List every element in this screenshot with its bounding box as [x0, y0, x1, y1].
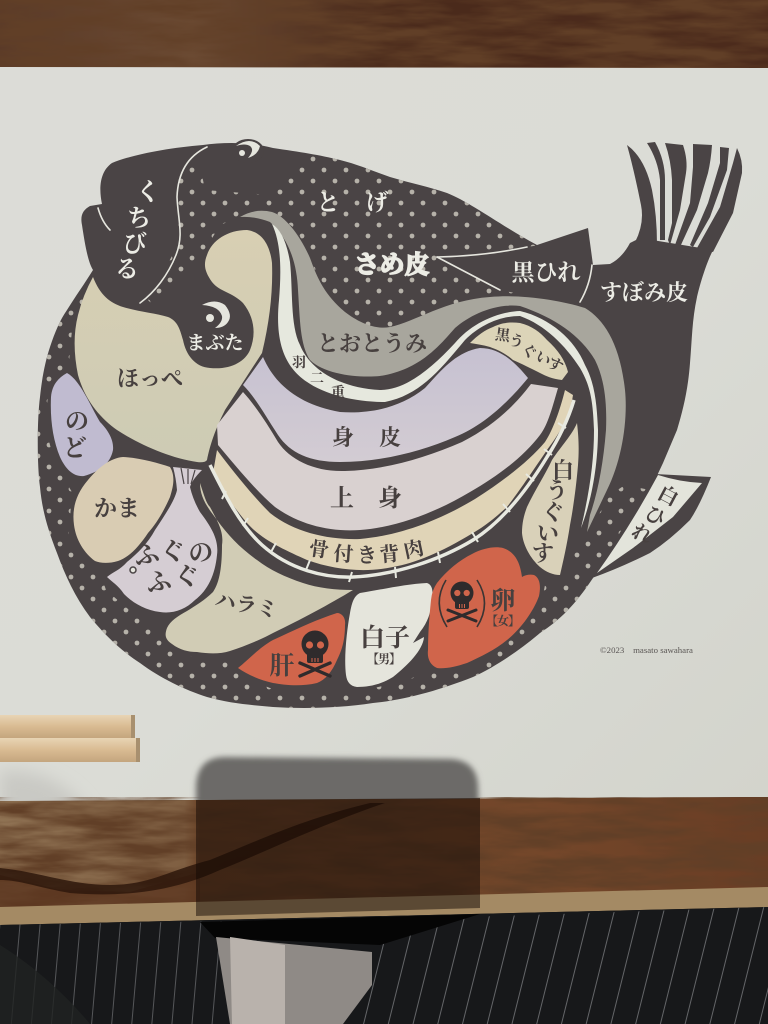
label 白ひれ: 白: [654, 481, 682, 511]
label 骨付き背肉: [307, 536, 426, 567]
label ハラミ: ハラミ: [213, 588, 279, 622]
eye on top of head: [232, 139, 264, 163]
black warbler muscle 黒うぐいす: [470, 322, 568, 380]
label 白子: 白子: [360, 624, 410, 652]
liver region 肝: [238, 613, 345, 685]
label ふぐのふぐ: ぐ: [159, 537, 187, 568]
paper placemat: [0, 67, 768, 801]
dark pinstripe clothing below table: [0, 907, 768, 1024]
small fugu shape ふぐのふぐ: [107, 467, 217, 612]
label ほっぺ: ほっぺ: [117, 366, 183, 391]
label 黒ひれ: 黒ひれ: [512, 260, 580, 285]
collar region かま: [73, 457, 173, 563]
label 女 bracket: 【女】: [486, 613, 520, 628]
label 黒うぐいす: [494, 326, 566, 376]
dotted skin zones: [30, 150, 650, 720]
label すぼみ皮: すぼみ皮: [600, 280, 688, 305]
tail fin rays: [627, 142, 742, 252]
label かま: かま: [94, 496, 140, 521]
とおとうみ grey band: [240, 211, 626, 532]
label 黒うぐいす: ぐ: [519, 341, 539, 363]
label ふぐのふぐ: ぐ: [173, 562, 201, 593]
phone shadow on paper and table: [196, 757, 480, 916]
faint shadow lower left: [0, 770, 88, 801]
parentheses around ovary skull: [439, 580, 484, 627]
label 卵: 卵: [490, 587, 516, 615]
label 白ひれ: ひ: [641, 502, 669, 531]
fish diagram: [30, 139, 742, 720]
mouth lines: [98, 147, 207, 303]
label ふぐのふぐ: ふ: [133, 540, 161, 571]
eyelid eye mark: [202, 302, 230, 328]
label 骨付き背肉: 付: [333, 541, 354, 567]
label まぶた: まぶた: [186, 332, 244, 354]
wooden table top edge: [0, 0, 768, 70]
label ふぐのふぐ: [133, 537, 215, 598]
骨付き背肉 peach band: [213, 390, 573, 570]
label 黒うぐいす: う: [507, 331, 526, 352]
skull and crossbones on ovary: [448, 582, 476, 621]
上身 pale pink main flesh: [217, 384, 558, 530]
wooden table bottom section: [0, 797, 768, 910]
copyright line: ©2023 masato sawahara: [600, 645, 693, 655]
label 白ひれ: [628, 481, 682, 549]
label さめ皮: さめ皮: [354, 251, 430, 279]
milt region 白子: [345, 583, 432, 687]
label とおとうみ: とおとうみ: [317, 331, 427, 356]
chopsticks: [0, 715, 140, 762]
身皮 lilac band: [243, 348, 528, 462]
label 肝: 肝: [269, 652, 295, 680]
white warbler muscle 白うぐいす: [522, 423, 579, 575]
label 上身: 上身: [330, 485, 402, 512]
label くちびる: くちびる: [115, 180, 160, 283]
label ふぐのふぐ: ふ: [145, 567, 173, 598]
label 骨付き背肉: 背: [378, 542, 400, 567]
light cloth visible between legs: [216, 937, 372, 1024]
fish body silhouette: [38, 143, 713, 708]
label 黒うぐいす: す: [544, 354, 566, 376]
label とげ: とげ: [316, 190, 388, 215]
label 羽二重: 羽二重: [292, 355, 345, 401]
label 身皮: 身皮: [332, 425, 401, 450]
label ふぐのふぐ: の: [187, 538, 215, 569]
cheek region ほっぺ: [75, 230, 272, 462]
label 黒うぐいす: 黒: [494, 326, 512, 345]
label 黒うぐいす: い: [532, 349, 553, 370]
label 男 bracket: 【男】: [367, 652, 401, 666]
dorsal fin white lines 黒ひれ: [437, 247, 592, 302]
skull and crossbones on liver: [300, 630, 330, 676]
羽二重 white band: [272, 224, 598, 528]
belly region ハラミ: [166, 483, 353, 653]
tan wood strip on the table edge: [0, 887, 768, 925]
label 骨付き背肉: 肉: [401, 536, 426, 563]
label 白うぐいす: 白うぐいす: [532, 458, 574, 566]
throat region のど: [51, 373, 113, 476]
rib bone strip with ticks: [210, 400, 574, 582]
white pectoral fin 白ひれ: [592, 474, 711, 578]
label 白ひれ: れ: [628, 519, 656, 549]
ovary region 卵: [428, 547, 540, 668]
label 骨付き背肉: き: [357, 545, 377, 567]
label のど: のど: [63, 409, 89, 462]
label 骨付き背肉: 骨: [307, 537, 330, 562]
